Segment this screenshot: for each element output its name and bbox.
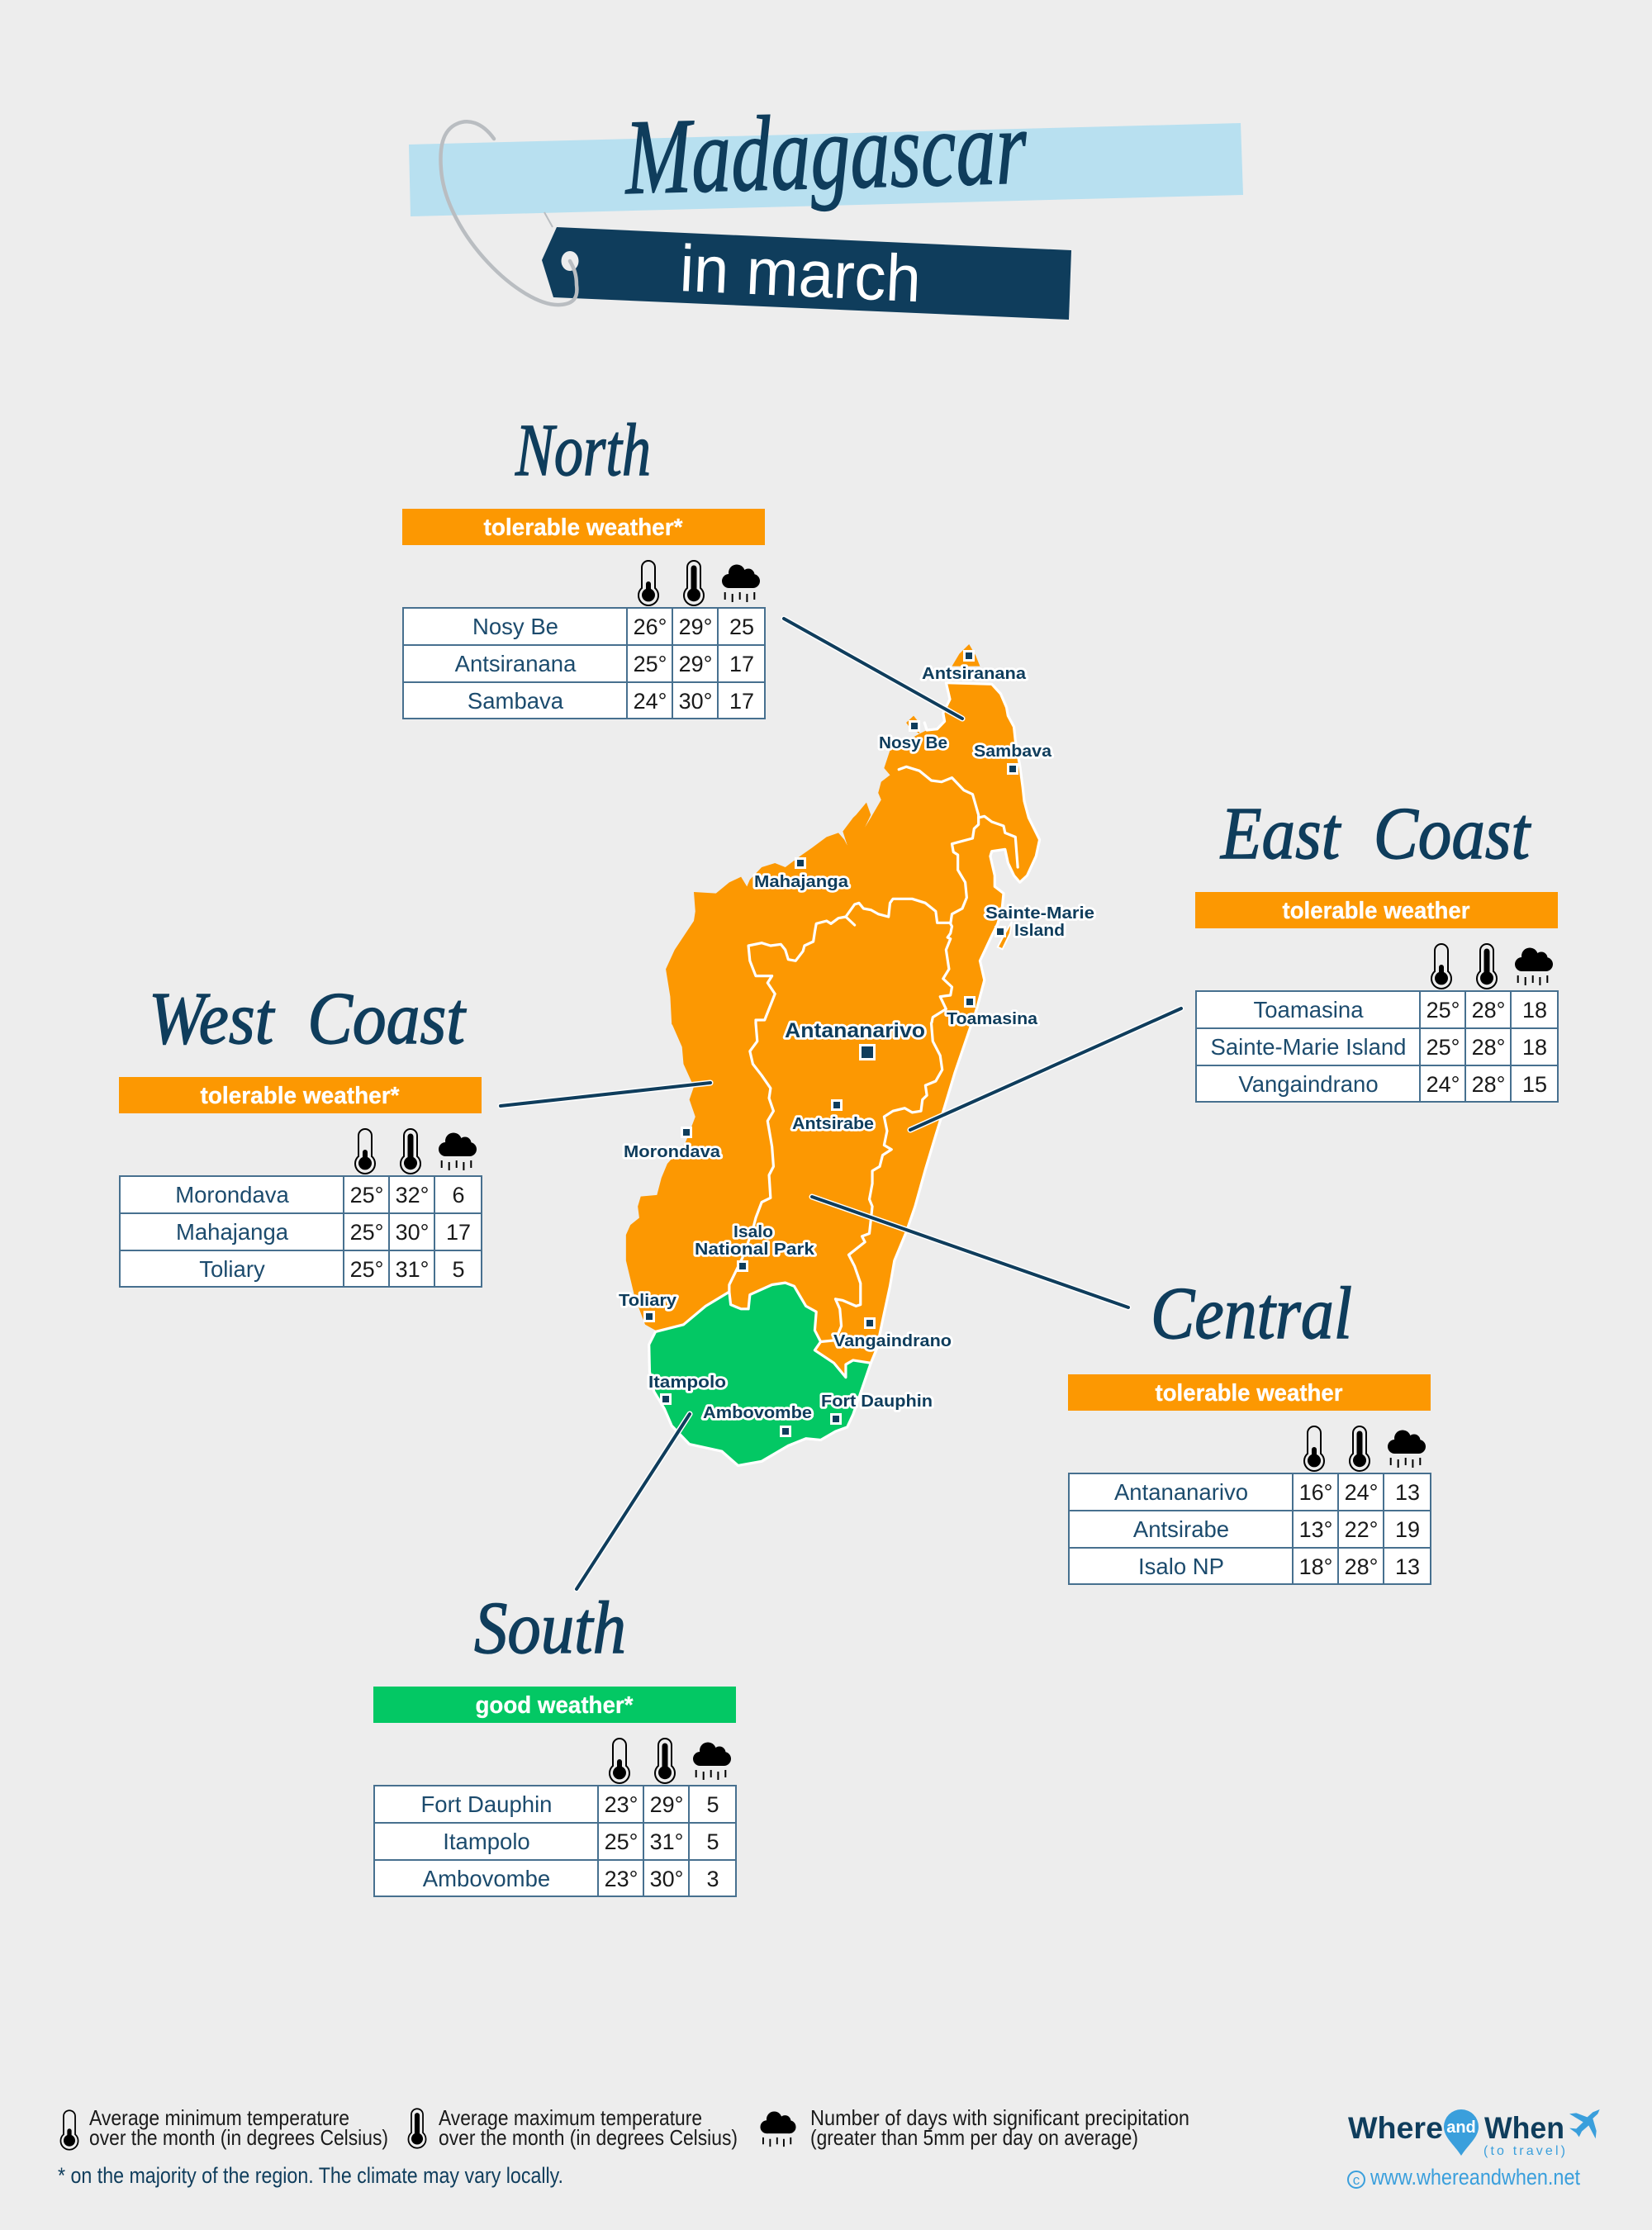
heading: South: South [474, 1587, 626, 1669]
tag [542, 227, 1071, 320]
region border: east inlet [979, 816, 1018, 867]
climate table: Fort Dauphin [421, 1791, 552, 1817]
climate table [1069, 1473, 1431, 1584]
panel: Central [1068, 1273, 1431, 1584]
copyright symbol [1348, 2171, 1365, 2188]
wordmark: When: When [1484, 2111, 1564, 2145]
climate table [120, 1176, 482, 1287]
icon: minimum temperature [60, 2110, 78, 2150]
short string segment [544, 212, 553, 227]
leader line: east coast [910, 1008, 1181, 1130]
climate table: 17 [446, 1220, 471, 1245]
heading: East Coast: East Coast [1219, 793, 1531, 875]
climate table: 25° [1427, 1035, 1460, 1060]
city labels: Vangaindrano [833, 1332, 952, 1350]
climate table: 5 [706, 1792, 719, 1817]
pin label: and [1446, 2118, 1476, 2137]
climate table [1196, 991, 1558, 1102]
website: www.whereandwhen.net [1370, 2165, 1580, 2190]
legend text: maximum: Average maximum temperature [439, 2105, 702, 2130]
map of Madagascar [626, 644, 1040, 1465]
climate table [403, 608, 765, 719]
climate table [374, 1786, 736, 1896]
leader line: west coast [501, 1083, 710, 1106]
coastline top [924, 683, 1040, 1024]
weather banner [373, 1687, 736, 1723]
weather banner: tolerable weather* [484, 515, 683, 541]
climate table: 25° [634, 652, 667, 676]
icon: precipitation [760, 2111, 796, 2147]
tag hole [562, 251, 578, 271]
icon: maximum temperature [408, 2109, 426, 2148]
climate table: 3 [706, 1867, 719, 1891]
legend text: minimum: over the month (in degrees Celsius) [89, 2125, 388, 2150]
climate table: 29° [679, 614, 712, 639]
climate table: 30° [650, 1867, 683, 1891]
legend text: maximum [439, 2105, 738, 2150]
panel: East Coast [1195, 793, 1558, 1102]
climate table: 24° [1427, 1072, 1460, 1097]
climate table: 31° [650, 1829, 683, 1854]
climate table: Morondava [175, 1182, 289, 1208]
southern orange land [626, 1023, 971, 1378]
tagline: (to travel) [1483, 2144, 1565, 2158]
climate table: Mahajanga [176, 1219, 289, 1245]
climate table: 29° [679, 652, 712, 676]
climate table: 23° [605, 1867, 638, 1891]
climate table: 25° [350, 1257, 383, 1282]
region border: central east [821, 1023, 942, 1341]
city labels: Sambava [974, 743, 1052, 761]
heading: Central: Central [1151, 1273, 1352, 1355]
climate table: 31° [396, 1257, 429, 1282]
column icons [638, 561, 760, 605]
climate table: 28° [1345, 1554, 1378, 1579]
climate table: 25° [350, 1220, 383, 1245]
column icons [1431, 944, 1553, 989]
climate table: 17 [729, 652, 754, 676]
islet: Sainte-Marie [998, 922, 1012, 949]
column icons [610, 1739, 731, 1783]
string loop [440, 121, 577, 305]
climate table: 32° [396, 1183, 429, 1208]
leader line: central [812, 1197, 1128, 1307]
climate table: 13° [1299, 1517, 1332, 1542]
panel: West Coast [119, 978, 482, 1287]
title band [409, 123, 1243, 216]
city labels: Nosy Be [879, 734, 947, 752]
leader line: south [577, 1414, 690, 1589]
climate table: 25° [605, 1829, 638, 1854]
climate table: 6 [452, 1183, 465, 1208]
copyright symbol: c [1353, 2172, 1360, 2188]
city labels: Ambovombe [703, 1404, 812, 1422]
weather banner: tolerable weather* [200, 1083, 400, 1109]
climate table: 28° [1472, 998, 1505, 1022]
climate table: Antsirabe [1133, 1516, 1229, 1542]
weather banner: tolerable weather [1282, 898, 1470, 924]
climate table: Sainte-Marie Island [1211, 1034, 1406, 1060]
climate table: 25 [729, 614, 754, 639]
climate table: 18° [1299, 1554, 1332, 1579]
climate table: 18 [1522, 998, 1547, 1022]
climate table: 5 [706, 1829, 719, 1854]
climate table: 25° [1427, 998, 1460, 1022]
region border: central north [748, 899, 951, 1024]
region border: west central [729, 1023, 773, 1292]
icon: plane [1569, 2109, 1600, 2138]
climate table: 28° [1472, 1035, 1505, 1060]
island: Nosy Be [906, 716, 919, 733]
climate table: Itampolo [443, 1829, 530, 1854]
city markers [644, 651, 1018, 1435]
climate table: 30° [679, 689, 712, 714]
city labels: Fort Dauphin [821, 1393, 933, 1411]
climate table: Toliary [199, 1256, 265, 1282]
column icons [355, 1129, 477, 1174]
city labels: Toliary [619, 1292, 677, 1310]
legend text: precipitation [810, 2105, 1189, 2150]
south green region [649, 1283, 871, 1465]
city labels: Island [1014, 922, 1065, 940]
climate table: 19 [1395, 1517, 1420, 1542]
leader line: north [784, 619, 962, 719]
title: Madagascar: Madagascar [623, 88, 1028, 217]
wordmark: Where: Where [1348, 2111, 1443, 2145]
weather banner [119, 1077, 482, 1113]
climate table: 18 [1522, 1035, 1547, 1060]
climate table: 28° [1472, 1072, 1505, 1097]
logo: Where and When [1348, 2109, 1600, 2190]
city labels [619, 665, 1094, 1422]
city labels: Itampolo [648, 1374, 726, 1392]
footnote: * on the majority of the region. The climate may vary locally. [58, 2163, 563, 2188]
title block [409, 88, 1243, 320]
heading: West Coast: West Coast [149, 978, 467, 1060]
climate table: 24° [634, 689, 667, 714]
city labels: Isalo [733, 1223, 773, 1241]
city labels: Sainte-Marie [985, 904, 1094, 923]
legend text: maximum: over the month (in degrees Celsius) [439, 2125, 738, 2150]
panel: North [402, 410, 765, 719]
city labels: Antsirabe [792, 1115, 874, 1133]
weather banner [1195, 892, 1558, 928]
weather banner [402, 509, 765, 545]
legend text: minimum: Average minimum temperature [89, 2105, 349, 2130]
climate table: Isalo NP [1138, 1554, 1224, 1579]
climate table: 13 [1395, 1554, 1420, 1579]
climate table: 23° [605, 1792, 638, 1817]
climate table: Ambovombe [423, 1866, 550, 1891]
climate table: Toamasina [1254, 997, 1364, 1022]
climate table: 16° [1299, 1480, 1332, 1505]
legend text: precipitation: Number of days with significant precipitation [810, 2105, 1189, 2130]
legend [58, 2105, 1189, 2188]
climate table: 17 [729, 689, 754, 714]
climate table: 15 [1522, 1072, 1547, 1097]
climate table: 29° [650, 1792, 683, 1817]
climate table: 22° [1345, 1517, 1378, 1542]
climate table: 24° [1345, 1480, 1378, 1505]
heading: North: North [515, 410, 651, 491]
coastline bottom [871, 1023, 971, 1363]
climate table: Nosy Be [472, 614, 558, 639]
city labels: Mahajanga [754, 873, 849, 891]
icon: map pin [1444, 2109, 1479, 2156]
city labels: Antsiranana [922, 665, 1027, 683]
column icons [1304, 1426, 1426, 1471]
city labels: Morondava [624, 1143, 721, 1161]
city labels: National Park [695, 1241, 815, 1259]
city labels: Toamasina [947, 1010, 1038, 1028]
weather banner: tolerable weather [1155, 1380, 1343, 1407]
climate table: Antsiranana [455, 651, 577, 676]
climate table: Sambava [468, 688, 564, 714]
climate table: 25° [350, 1183, 383, 1208]
climate table: Vangaindrano [1238, 1071, 1379, 1097]
climate table: 26° [634, 614, 667, 639]
city labels: Antananarivo [785, 1019, 925, 1042]
panel: South [373, 1587, 736, 1896]
northern orange land [666, 683, 1040, 1024]
climate table: 30° [396, 1220, 429, 1245]
climate table: 5 [452, 1257, 465, 1282]
region borders top [899, 766, 979, 1024]
map bottom half fills [626, 1023, 971, 1465]
map top half fills [666, 644, 1040, 1024]
subtitle: in march: in march [678, 231, 923, 316]
climate table: Antananarivo [1114, 1479, 1248, 1505]
weather banner: good weather* [476, 1692, 634, 1719]
climate table: 13 [1395, 1480, 1420, 1505]
weather banner [1068, 1374, 1431, 1411]
legend text: precipitation: (greater than 5mm per day on average) [810, 2125, 1138, 2150]
legend text: minimum [89, 2105, 388, 2150]
island: Antsiranana tip [952, 644, 980, 667]
